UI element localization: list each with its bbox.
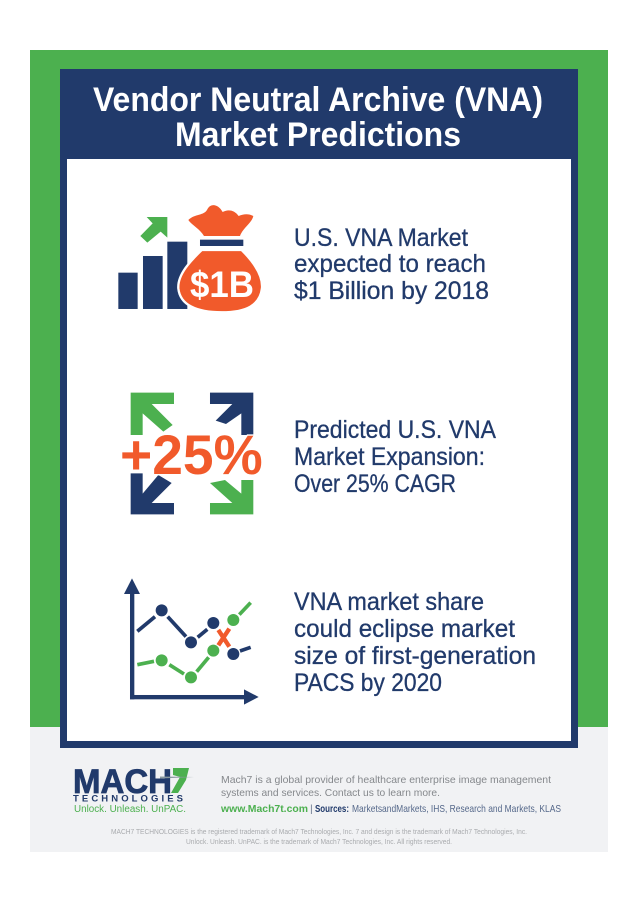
text: market share: VNA market share <box>294 588 484 616</box>
bag label: $1B <box>190 264 254 305</box>
bag tie <box>188 205 253 236</box>
text: market share: size of first-generation <box>294 642 536 670</box>
arrow top right <box>210 393 253 435</box>
logo: Mach7 <box>73 763 194 815</box>
text: market size: expected to reach <box>294 250 486 278</box>
logo technologies: TECHNOLOGIES <box>73 794 183 804</box>
text: market size: $1 Billion by 2018 <box>294 277 489 305</box>
title: Vendor Neutral Archive (VNA) <box>93 81 543 119</box>
icon: line chart <box>124 578 259 705</box>
icon: +25% with arrows <box>120 393 263 514</box>
arrow bottom right <box>210 480 253 514</box>
axes <box>124 578 259 705</box>
text: expansion: Over 25% CAGR <box>294 470 456 498</box>
logo swoosh <box>160 776 194 778</box>
text: expansion: Market Expansion: <box>294 443 485 471</box>
green arrow <box>140 217 167 243</box>
text: company description: systems and services. Contact us to learn more. <box>221 787 440 799</box>
logo seven <box>171 768 189 793</box>
panel: main card <box>64 72 574 744</box>
green background <box>30 50 608 727</box>
title banner <box>60 69 578 159</box>
text: website and sources: www.Mach7t.com <box>220 803 308 815</box>
logo: Mach7: MACH <box>73 763 172 801</box>
text: website and sources: | <box>310 803 313 815</box>
footer background <box>30 727 608 852</box>
text: market share: could eclipse market <box>294 615 515 643</box>
crossover mark <box>218 629 229 647</box>
text: market share: PACS by 2020 <box>294 669 442 697</box>
bag band <box>200 240 243 246</box>
text: website and sources: Sources: <box>315 803 349 815</box>
text: legal notice: Unlock. Unleash. UnPAC. is the trademark of Mach7 Technologies, Inc. All rights reserved. <box>186 839 452 846</box>
arrow bottom left <box>131 473 174 514</box>
percent label: +25% <box>120 424 263 486</box>
icon: bars and money bag <box>118 205 262 312</box>
text: expansion: Predicted U.S. VNA <box>294 416 496 444</box>
title: Market Predictions <box>175 116 461 154</box>
logo tagline: Unlock. Unleash. UnPAC. <box>74 804 186 815</box>
text: legal notice: MACH7 TECHNOLOGIES is the registered trademark of Mach7 Technologies, Inc. 7 and design is the trademark of Mach7 Technologies, Inc. <box>111 829 527 836</box>
bars <box>118 242 187 309</box>
arrow top left <box>131 393 174 435</box>
text: website and sources <box>220 803 561 815</box>
green series <box>137 603 251 674</box>
text: website and sources: MarketsandMarkets, IHS, Research and Markets, KLAS <box>352 803 561 815</box>
navy series <box>137 617 251 651</box>
bag body <box>178 250 262 312</box>
text: market size: U.S. VNA Market <box>294 224 468 252</box>
text: company description: Mach7 is a global provider of healthcare enterprise image management <box>221 774 551 786</box>
